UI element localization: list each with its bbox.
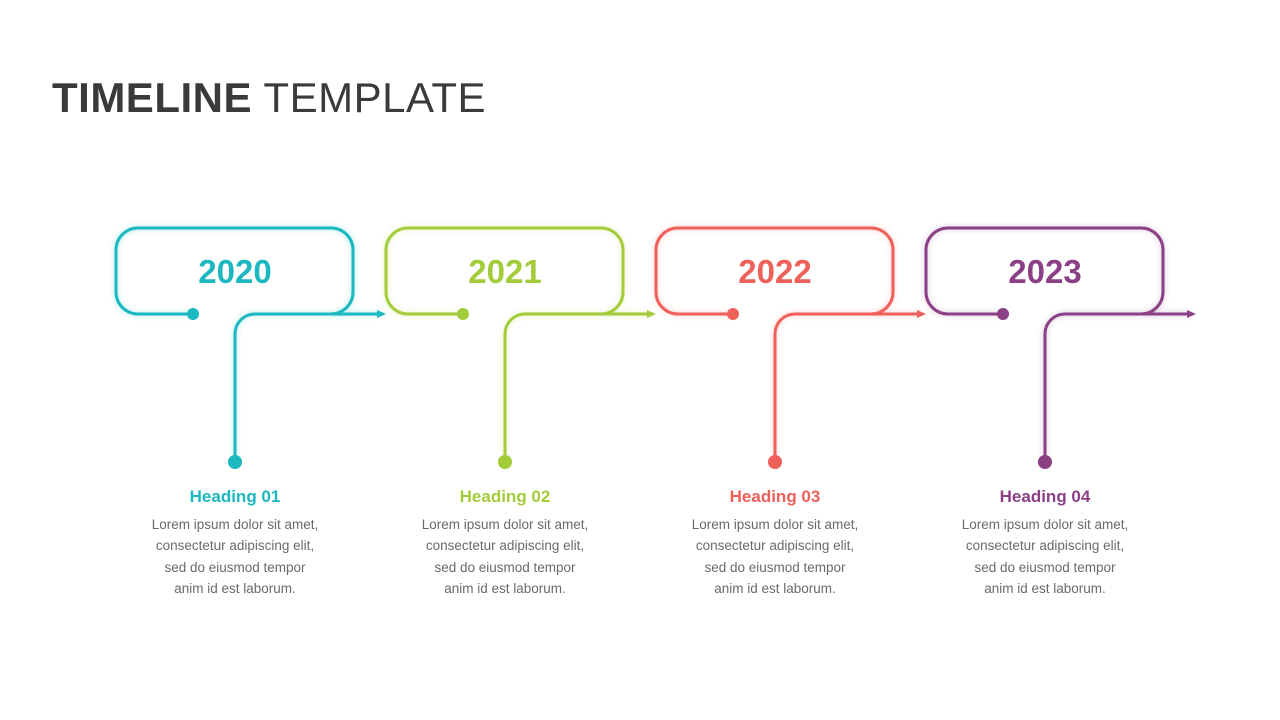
text block: heading 02: sed do eiusmod tempor	[434, 560, 576, 575]
text block: heading 04: consectetur adipiscing elit,	[966, 538, 1124, 553]
step 2022	[656, 228, 926, 469]
text block: heading 04: Heading 04	[1000, 487, 1090, 506]
text block: heading 01: consectetur adipiscing elit,	[156, 538, 314, 553]
text block: heading 01	[152, 487, 318, 596]
text block: heading 04: Lorem ipsum dolor sit amet,	[962, 517, 1128, 532]
text block: heading 02: Lorem ipsum dolor sit amet,	[422, 517, 588, 532]
step 2023	[926, 228, 1196, 469]
step 2021: 2021	[468, 253, 542, 290]
step 2020	[116, 228, 386, 469]
text block: heading 01: anim id est laborum.	[174, 581, 296, 596]
text block: heading 02: anim id est laborum.	[444, 581, 566, 596]
step 2023: 2023	[1008, 253, 1082, 290]
text block: heading 04: anim id est laborum.	[984, 581, 1106, 596]
text block: heading 04: sed do eiusmod tempor	[974, 560, 1116, 575]
text block: heading 03: consectetur adipiscing elit,	[696, 538, 854, 553]
step 2020: 2020	[198, 253, 272, 290]
step 2021	[386, 228, 656, 469]
text block: heading 02: Heading 02	[460, 487, 550, 506]
text block: heading 01: Heading 01	[190, 487, 280, 506]
title: TIMELINE TEMPLATE	[52, 74, 486, 121]
text block: heading 02: consectetur adipiscing elit,	[426, 538, 584, 553]
text block: heading 01: Lorem ipsum dolor sit amet,	[152, 517, 318, 532]
text block: heading 03: anim id est laborum.	[714, 581, 836, 596]
text block: heading 03: Heading 03	[730, 487, 820, 506]
text block: heading 03: sed do eiusmod tempor	[704, 560, 846, 575]
text block: heading 02	[422, 487, 588, 596]
text block: heading 04	[962, 487, 1128, 596]
step 2022: 2022	[738, 253, 812, 290]
text block: heading 03	[692, 487, 858, 596]
text block: heading 01: sed do eiusmod tempor	[164, 560, 306, 575]
text block: heading 03: Lorem ipsum dolor sit amet,	[692, 517, 858, 532]
